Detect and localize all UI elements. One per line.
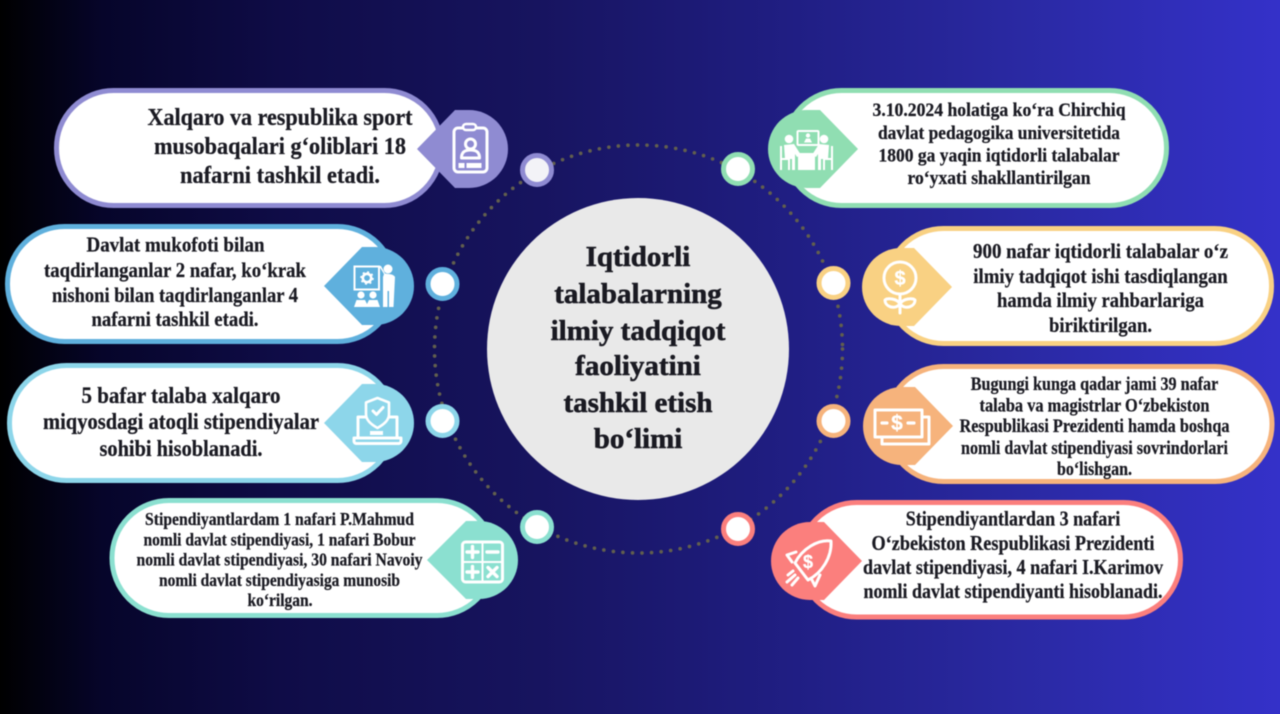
icon: banknotes bbox=[863, 387, 953, 465]
icon: meeting at table bbox=[768, 110, 858, 188]
panel: sport winners: musobaqalari g‘oliblari 18 bbox=[154, 134, 406, 160]
icon: money flower: $ bbox=[894, 268, 906, 290]
panel: sport winners: Xalqaro va respublika sport bbox=[148, 105, 412, 131]
icon: money flower bbox=[862, 248, 952, 326]
panel: international scholarships: miqyosdagi atoqli stipendiyalar bbox=[43, 409, 319, 434]
panel: scholarship holders: nomli davlat stipendiyasi, 1 nafari Bobur bbox=[144, 530, 416, 550]
panel: talented students list: ro‘yxati shakllantirilgan bbox=[908, 168, 1091, 189]
panel: state scholarship winners: bo‘lishgan. bbox=[1057, 460, 1132, 480]
panel: state awards: nafarni tashkil etadi. bbox=[92, 307, 258, 331]
panel: scholarship holders: nomli davlat stipendiyasi, 30 nafari Navoiy bbox=[136, 550, 422, 570]
node: international scholarships bbox=[428, 406, 457, 436]
panel: state scholarship winners: nomli davlat stipendiyasi sovrindorlari bbox=[961, 439, 1228, 459]
panel: approved research bbox=[886, 228, 1272, 344]
panel: scholarship holders bbox=[112, 500, 494, 616]
panel: talented students list: 1800 ga yaqin iqtidorli talabalar bbox=[878, 146, 1120, 166]
panel: state scholarship winners: Bugungi kunga qadar jami 39 nafar bbox=[971, 375, 1218, 395]
panel: scholarship holders: ko‘rilgan. bbox=[248, 590, 312, 610]
node: state scholarship winners bbox=[819, 406, 848, 436]
node: approved research bbox=[819, 268, 848, 298]
node: state awards bbox=[428, 270, 457, 298]
panel: state awards bbox=[8, 226, 394, 342]
panel: sport winners: nafarni tashkil etadi. bbox=[180, 163, 380, 189]
panel: approved research: hamda ilmiy rahbarlariga bbox=[997, 288, 1204, 312]
icon: id badge clipboard bbox=[417, 110, 508, 188]
icon: calculator bbox=[427, 521, 518, 599]
panel: presidential scholarship: Stipendiyantlardan 3 nafari bbox=[906, 506, 1120, 530]
central circle with title: faoliyatini bbox=[575, 350, 701, 382]
panel: approved research: 900 nafar iqtidorli talabalar o‘z bbox=[973, 239, 1228, 263]
node: scholarship holders bbox=[522, 512, 552, 542]
dotted ring bbox=[434, 145, 842, 553]
icon: shield over laptop bbox=[324, 384, 414, 462]
panel: talented students list bbox=[784, 90, 1166, 206]
panel: state awards: nishoni bilan taqdirlanganlar 4 bbox=[52, 283, 298, 307]
panel: presidential scholarship bbox=[800, 502, 1180, 617]
icon: banknotes: $ bbox=[891, 412, 903, 435]
panel: scholarship holders: Stipendiyantlardam 1 nafari P.Mahmud bbox=[145, 509, 414, 529]
icon: dollar rocket: $ bbox=[803, 552, 813, 572]
panel: sport winners bbox=[56, 90, 442, 206]
node: presidential scholarship bbox=[724, 514, 752, 544]
central circle with title: Iqtidorli bbox=[586, 241, 690, 273]
central circle with title: ilmiy tadqiqot bbox=[551, 315, 726, 347]
panel: state scholarship winners bbox=[886, 366, 1272, 482]
node: sport winners bbox=[522, 156, 552, 184]
central circle with title bbox=[487, 198, 789, 500]
panel: state awards: taqdirlanganlar 2 nafar, ko‘krak bbox=[44, 258, 306, 282]
panel: international scholarships: 5 bafar talaba xalqaro bbox=[82, 383, 280, 408]
panel: presidential scholarship: davlat stipendiyasi, 4 nafari I.Karimov bbox=[863, 555, 1163, 579]
panel: international scholarships bbox=[10, 366, 394, 480]
central circle with title: talabalarning bbox=[554, 278, 722, 310]
panel: talented students list: davlat pedagogika universitetida bbox=[878, 123, 1120, 144]
icon: dollar rocket bbox=[771, 522, 862, 600]
panel: presidential scholarship: nomli davlat stipendiyanti hisoblanadi. bbox=[864, 579, 1162, 603]
panel: scholarship holders: nomli davlat stipendiyasiga munosib bbox=[159, 570, 400, 590]
panel: state awards: Davlat mukofoti bilan bbox=[86, 232, 265, 256]
node: talented students list bbox=[724, 154, 752, 184]
panel: international scholarships: sohibi hisoblanadi. bbox=[100, 436, 262, 461]
central circle with title: bo‘limi bbox=[594, 423, 682, 455]
panel: talented students list: 3.10.2024 holatiga ko‘ra Chirchiq bbox=[872, 100, 1126, 121]
panel: approved research: biriktirilgan. bbox=[1049, 313, 1152, 337]
panel: approved research: ilmiy tadqiqot ishi tasdiqlangan bbox=[973, 264, 1228, 288]
panel: presidential scholarship: O‘zbekiston Respublikasi Prezidenti bbox=[872, 531, 1155, 555]
central circle with title: tashkil etish bbox=[563, 387, 713, 419]
panel: state scholarship winners: talaba va magistrlar O‘zbekiston bbox=[980, 396, 1210, 416]
panel: state scholarship winners: Respublikasi Prezidenti hamda boshqa bbox=[960, 417, 1230, 437]
icon: presenter with audience bbox=[324, 247, 414, 325]
